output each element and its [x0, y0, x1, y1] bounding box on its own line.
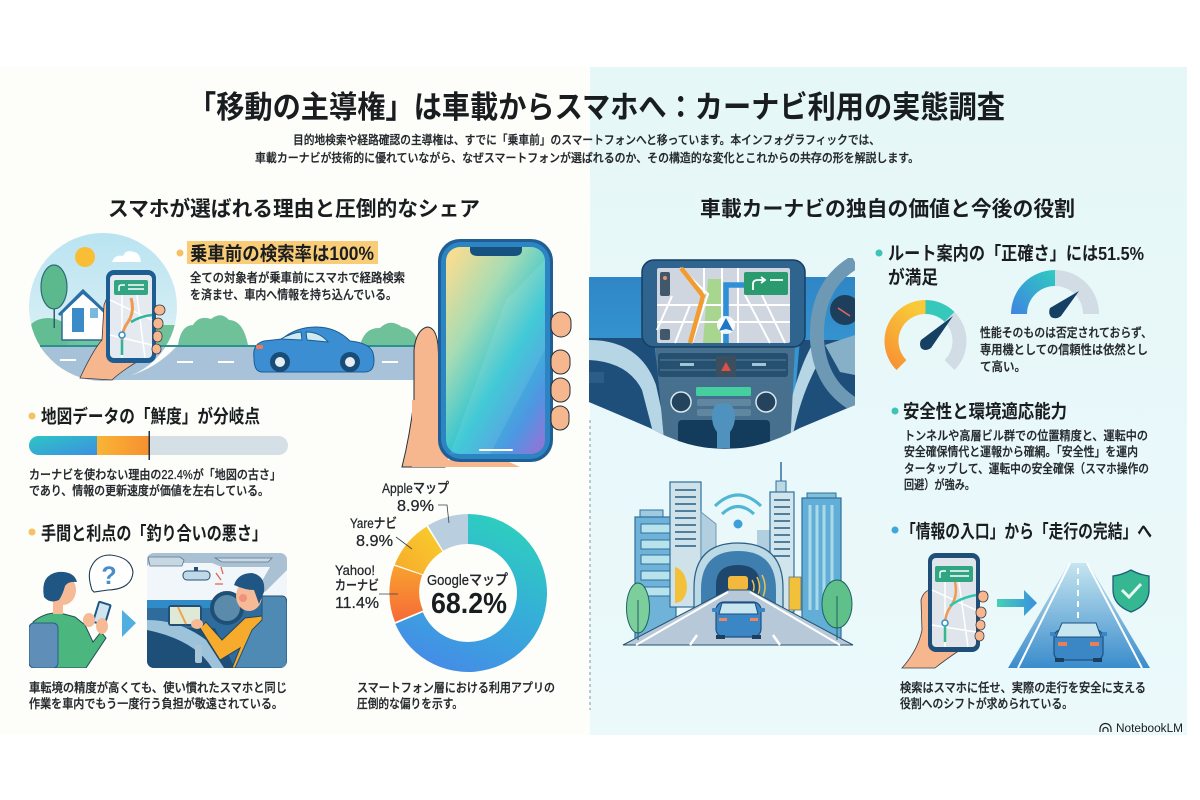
- icon: blue car: [254, 327, 374, 372]
- label: Yahoo: [335, 563, 398, 612]
- title: 「移動の主導権」は車載からスマホへ：カーナビ利用の実態調査: [188, 90, 1005, 125]
- blue car: [712, 602, 765, 639]
- trees: [626, 580, 852, 640]
- bullet block: effort and benefit: 車転境の精度が高くても、使い慣れたスマホと同じ: [29, 680, 287, 695]
- gauge: left: [884, 300, 967, 370]
- wifi icon: [715, 495, 761, 528]
- heading: right section: 車載カーナビの独自の価値と今後の役割: [700, 198, 1075, 221]
- arrow: phone to road: [997, 590, 1037, 616]
- label: Apple: [382, 480, 449, 523]
- label: Yare: Yareナビ: [350, 516, 397, 531]
- label: Yahoo: Yahoo!: [335, 563, 375, 578]
- tunnel: [694, 543, 783, 610]
- bullet block: effort and benefit: 作業を車内でもう一度行う負担が敬遠されている。: [29, 696, 283, 711]
- segment: Apple: [428, 514, 468, 551]
- icon: hand with phone navigation: [902, 553, 988, 668]
- donut chart: app share: [335, 480, 547, 672]
- label: Yahoo: カーナビ: [335, 578, 379, 593]
- illustration: large phone in hand: [402, 239, 571, 467]
- bullet block: accuracy 51.5%: [876, 243, 1152, 374]
- bar chart: 22.4%: [29, 431, 288, 460]
- panel: right background: [590, 67, 1187, 735]
- icon: hand holding phone: [80, 270, 165, 380]
- bullet block: safety and environment: トンネルや高層ビル群での位置精度と、運転中の: [904, 428, 1148, 443]
- bullet block: map freshness: 地図データの「鮮度」が分岐点: [41, 406, 260, 427]
- panel: left background: [0, 67, 590, 735]
- bullet block: effort and benefit: [28, 523, 287, 711]
- console: vents and hazard: [658, 353, 788, 377]
- caption: donut: [357, 681, 555, 711]
- bullet block: accuracy 51.5%: が満足: [888, 267, 938, 288]
- arrow: man to car: [122, 610, 136, 637]
- gear lever: [712, 403, 735, 448]
- illustration: phone search before driving: [20, 233, 420, 387]
- bullet block: search rate 100%: 全ての対象者が乗車前にスマホで経路検索: [190, 270, 405, 285]
- center label: Googleマップ: [427, 572, 508, 589]
- bullet block: map freshness: [28, 406, 288, 498]
- intro text: [255, 132, 919, 165]
- bullet block: from information entry to driving: 役割へのシフトが求められている。: [900, 696, 1073, 711]
- bullet block: safety and environment: [892, 401, 1149, 492]
- bullet block: from information entry to driving: 検索はスマホに任せ、実際の走行を安全に支える: [900, 680, 1146, 695]
- illustration: driver touching navigation: [147, 553, 287, 668]
- bullet block: map freshness: カーナビを使わない理由の22.4%が「地図の古さ」: [29, 467, 281, 482]
- tall buildings: [635, 462, 841, 641]
- navigation screen: [642, 260, 805, 347]
- bullet block: search rate 100%: 乗車前の検索率は100%: [190, 243, 374, 265]
- label: Yare: 8.9%: [356, 533, 393, 550]
- bullet block: safety and environment: タータップして、運転中の安全確保（スマホ操作の: [904, 461, 1149, 476]
- bullet block: safety and environment: 安全確保情代と運報から確網。「安全性」を運内: [904, 444, 1138, 459]
- caption: donut: 圧倒的な偏りを示す。: [357, 696, 463, 711]
- illustration: man using phone: [29, 555, 133, 668]
- bullet block: search rate 100%: [176, 241, 405, 302]
- label: Yare: [350, 516, 412, 550]
- bullet block: safety and environment: 回避）が強み。: [904, 477, 975, 492]
- label: Apple: Appleマップ: [382, 480, 449, 496]
- illustration: city and tunnel: [623, 462, 853, 645]
- center label: [427, 572, 508, 620]
- bullet block: accuracy 51.5%: 性能そのものは否定されておらず、: [980, 325, 1152, 340]
- bullet block: accuracy 51.5%: ルート案内の「正確さ」には51.5%: [888, 243, 1144, 264]
- intro text: 目的地検索や経路確認の主導権は、すでに「乗車前」のスマートフォンへと移っています。本インフォグラフィックでは、: [293, 132, 880, 147]
- console: display and knobs: [671, 387, 776, 448]
- caption: donut: スマートフォン層における利用アプリの: [357, 681, 555, 695]
- illustration: road ahead: [1008, 563, 1150, 668]
- speech bubble with question mark: ?: [101, 562, 117, 590]
- blue car rear: [1050, 623, 1107, 662]
- heading: left section: スマホが選ばれる理由と圧倒的なシェア: [108, 197, 480, 221]
- bullet block: search rate 100%: を済ませ、車内へ情報を持ち込んでいる。: [190, 287, 397, 302]
- bullet block: map freshness: であり、情報の更新速度が価値を左右している。: [29, 483, 269, 498]
- bullet block: safety and environment: 安全性と環境適応能力: [903, 401, 1067, 422]
- label: Apple: 8.9%: [397, 498, 434, 515]
- segment: Yare: [395, 527, 442, 574]
- illustration: car dashboard navigation: [589, 260, 860, 450]
- bullet block: accuracy 51.5%: て高い。: [980, 359, 1026, 374]
- segment: Yahoo: [389, 566, 423, 622]
- gauge: right: [1011, 270, 1099, 318]
- bullet block: from information entry to driving: [892, 521, 1152, 711]
- intro text: 車載カーナビが技術的に優れていながら、なぜスマートフォンが選ばれるのか、その構造的な変化とこれからの共存の形を解説します。: [255, 150, 919, 165]
- steering wheel: [817, 262, 860, 405]
- icon: safety shield: [1113, 570, 1149, 612]
- small yellow buildings: [675, 567, 687, 603]
- bullet block: effort and benefit: 手間と利点の「釣り合いの悪さ」: [41, 523, 267, 544]
- center label: 68.2%: [431, 588, 507, 620]
- road: [623, 590, 853, 645]
- logo: NotebookLM: NotebookLM: [1116, 723, 1183, 735]
- bullet block: accuracy 51.5%: 専用機としての信頼性は依然とし: [980, 342, 1148, 357]
- segment: Google: [395, 514, 547, 672]
- label: Yahoo: 11.4%: [335, 595, 379, 612]
